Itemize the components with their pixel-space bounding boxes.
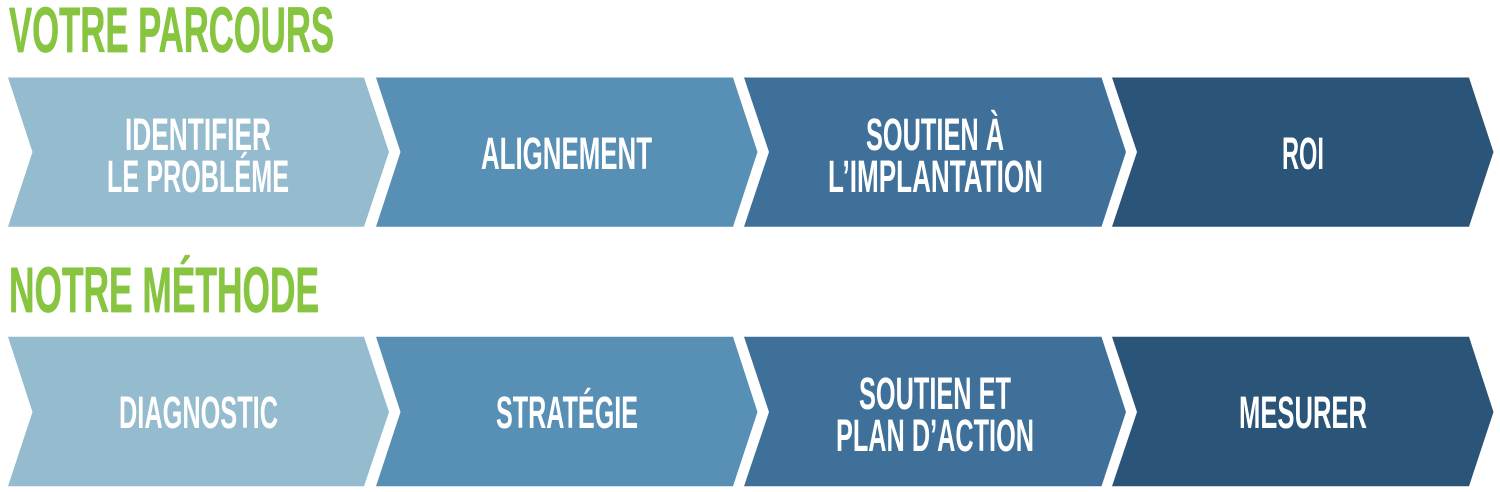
step: identifier le problème <box>8 78 389 227</box>
step: soutien à l'implantation: L’IMPLANTATION <box>828 151 1043 202</box>
step: soutien à l'implantation: SOUTIEN À <box>866 109 1004 160</box>
step: soutien et plan d'action <box>744 337 1126 486</box>
step: roi: ROI <box>1282 128 1324 179</box>
step: stratégie <box>376 337 758 486</box>
step: identifier le problème: IDENTIFIER <box>125 109 271 160</box>
heading: notre méthode: NOTRE MÉTHODE <box>9 254 319 326</box>
panel: votre parcours process <box>8 78 1494 227</box>
step: mesurer: MESURER <box>1239 387 1367 438</box>
step: alignement: ALIGNEMENT <box>481 128 652 179</box>
step: diagnostic <box>8 337 389 486</box>
step: diagnostic: DIAGNOSTIC <box>119 387 278 438</box>
step: soutien et plan d'action: PLAN D’ACTION <box>836 410 1034 461</box>
step: soutien et plan d'action: SOUTIEN ET <box>859 368 1011 419</box>
step: soutien à l'implantation <box>744 78 1126 227</box>
step: stratégie: STRATÉGIE <box>496 387 638 438</box>
step: identifier le problème: LE PROBLÉME <box>107 151 289 202</box>
step: alignement <box>376 78 758 227</box>
step: roi <box>1112 78 1494 227</box>
panel: notre méthode process <box>8 337 1494 486</box>
step: mesurer <box>1112 337 1494 486</box>
